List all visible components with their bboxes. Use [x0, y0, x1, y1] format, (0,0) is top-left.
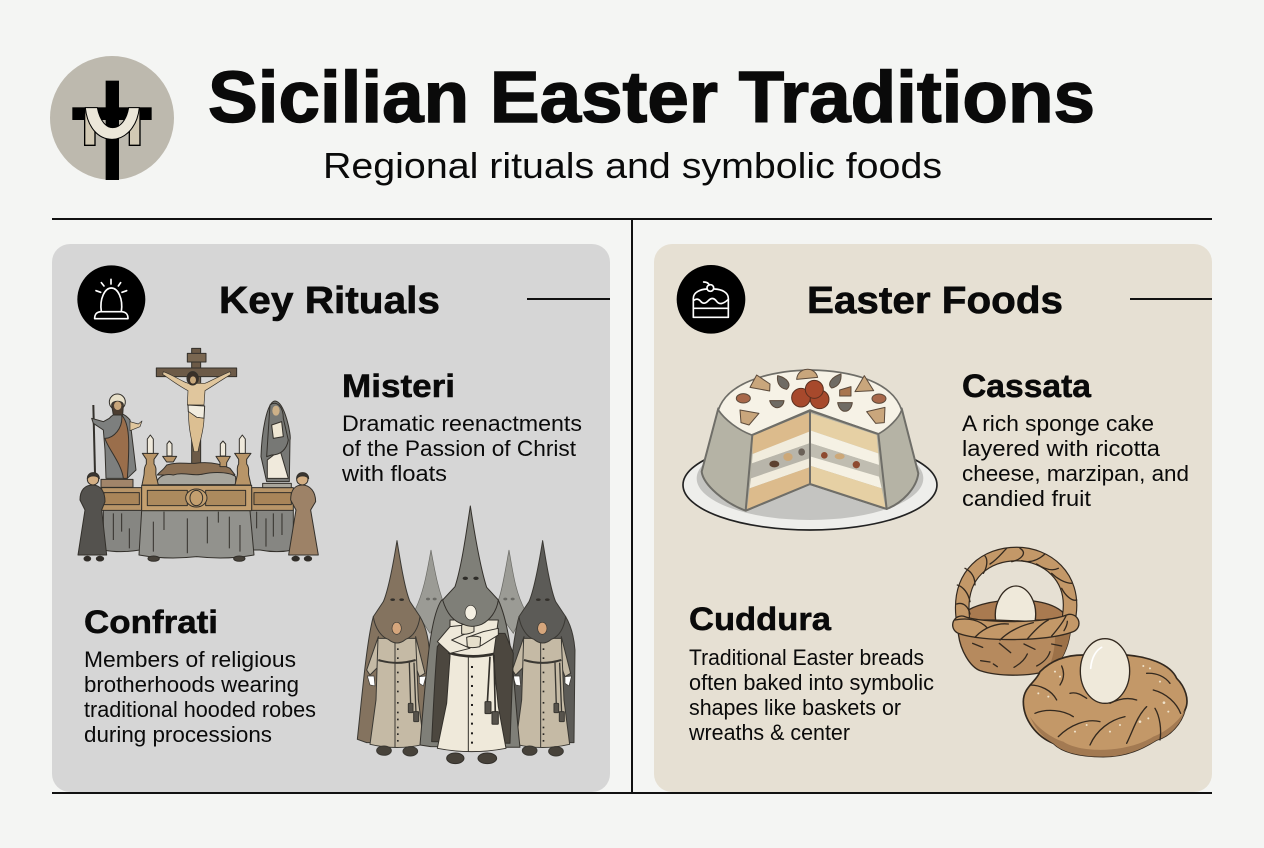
- text: cuddura description: often baked into symbolic: [689, 670, 934, 695]
- figure: dark hood: [503, 541, 575, 756]
- title: Sicilian Easter Traditions: [208, 58, 1095, 138]
- text: misteri description: of the Passion of Christ: [342, 436, 576, 461]
- illustration: hooded confrati: [357, 506, 575, 764]
- icon: cross with drape: [50, 56, 174, 180]
- text: confrati description: during processions: [84, 722, 272, 747]
- text: confrati description: brotherhoods wearing: [84, 672, 299, 697]
- text: cuddura description: wreaths & center: [688, 720, 850, 745]
- text: misteri description: [341, 411, 582, 486]
- heading: cuddura: Cuddura: [689, 601, 831, 637]
- panel: easter foods: [654, 244, 1212, 792]
- icon: cake: [677, 265, 745, 334]
- icon: glowing egg on stand: [77, 265, 145, 333]
- text: confrati description: traditional hooded robes: [84, 697, 316, 722]
- text: cuddura description: Traditional Easter breads: [689, 645, 924, 670]
- illustration: cuddura breads: [955, 548, 1187, 757]
- text: cassata description: [962, 411, 1189, 511]
- text: confrati description: [84, 647, 316, 747]
- heading: cassata: Cassata: [962, 368, 1091, 404]
- heading: key rituals: Key Rituals: [219, 280, 440, 322]
- text: cassata description: candied fruit: [962, 486, 1091, 511]
- text: cassata description: layered with ricotta: [962, 436, 1161, 461]
- text: confrati description: Members of religious: [84, 647, 296, 672]
- text: misteri description: Dramatic reenactments: [342, 411, 582, 436]
- text: misteri description: with floats: [341, 461, 447, 486]
- subtitle: Regional rituals and symbolic foods: [323, 145, 942, 186]
- text: cuddura description: shapes like baskets or: [689, 695, 901, 720]
- heading: easter foods: Easter Foods: [807, 280, 1063, 322]
- panel: key rituals: [52, 244, 610, 792]
- figure: brown hood: [357, 541, 429, 756]
- heading: confrati: Confrati: [84, 604, 218, 640]
- illustration: misteri float: [78, 348, 318, 561]
- text: cuddura description: [688, 645, 934, 745]
- text: cassata description: A rich sponge cake: [962, 411, 1154, 436]
- illustration: cassata cake: [683, 369, 937, 530]
- text: cassata description: cheese, marzipan, and: [962, 461, 1189, 486]
- heading: misteri: Misteri: [342, 368, 455, 404]
